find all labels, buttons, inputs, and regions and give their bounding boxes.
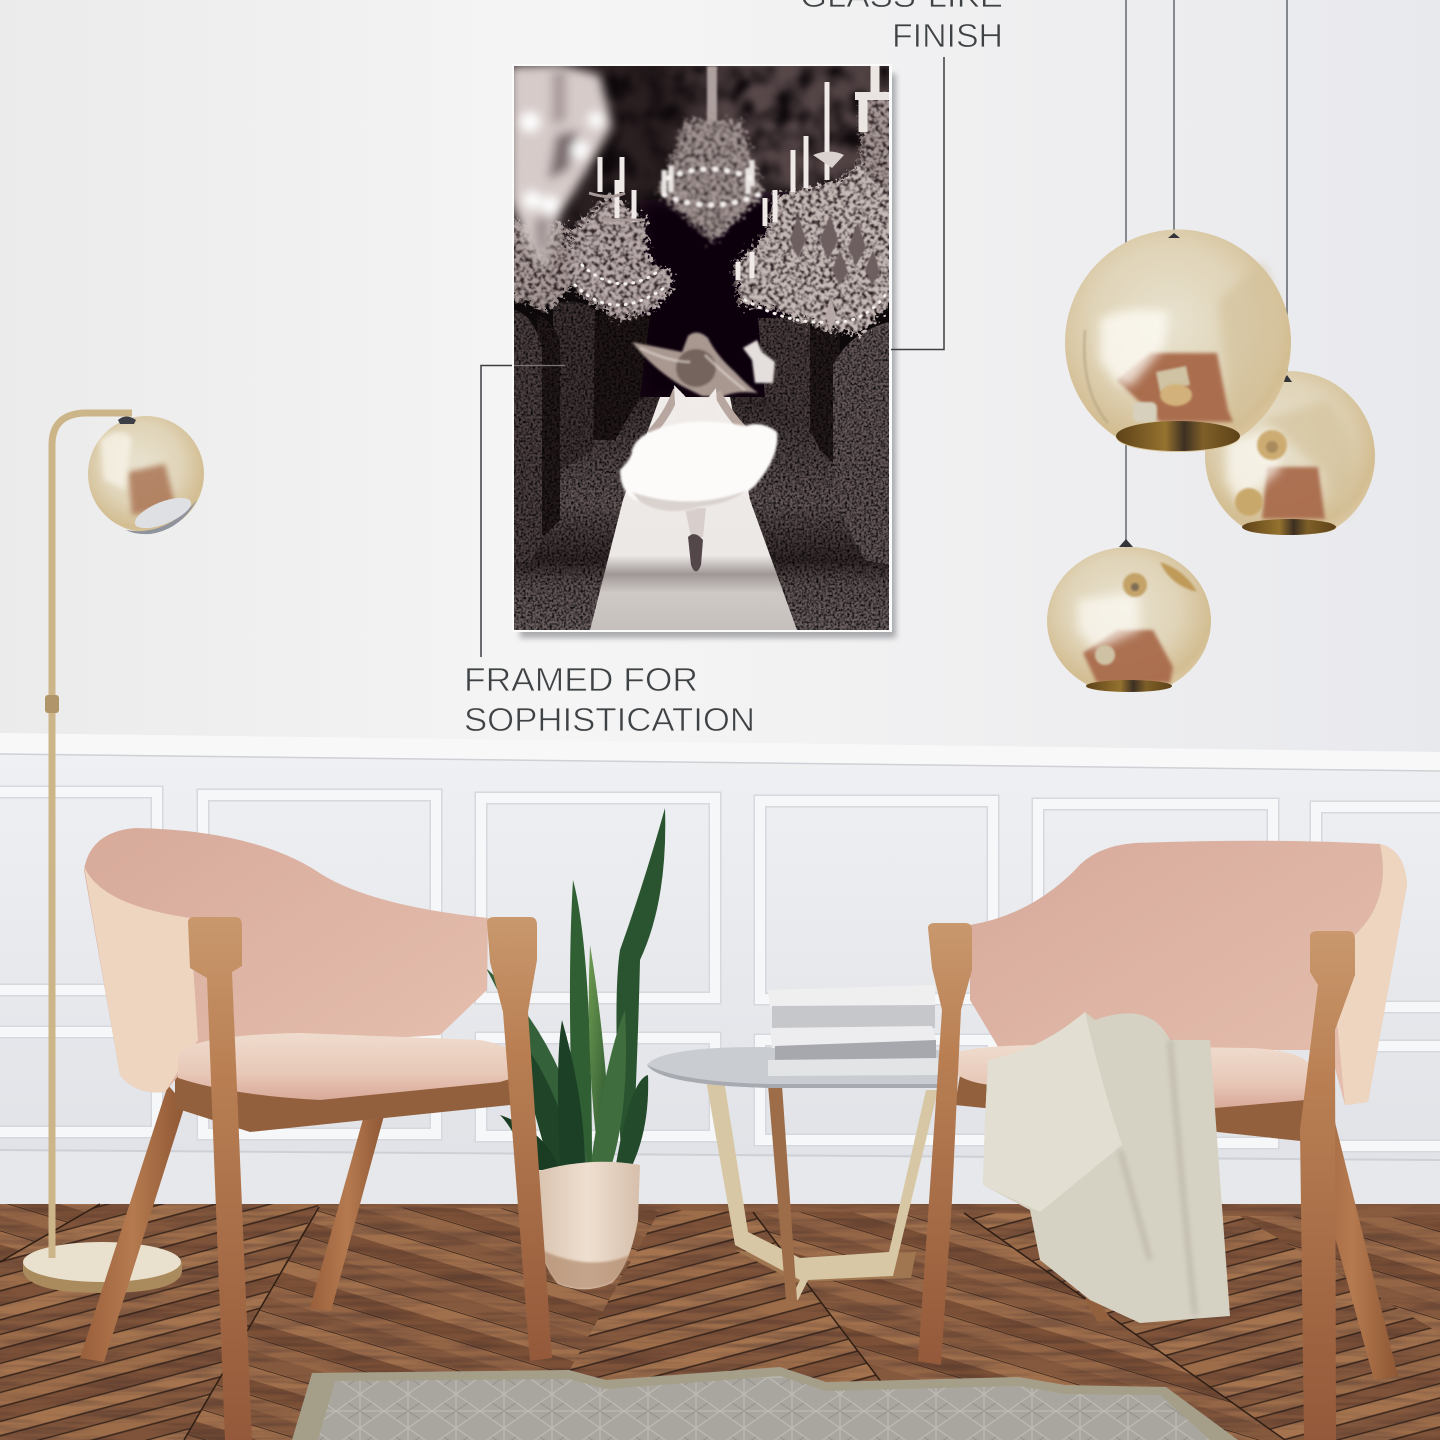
pendant lamp cords: [1126, 0, 1287, 548]
callout leader: glass-like finish: [891, 57, 944, 350]
left chandelier: [567, 157, 672, 320]
rug: [292, 1367, 1238, 1440]
right chandelier: [733, 66, 895, 335]
white rabbit figure: [743, 340, 775, 383]
snake plant: [486, 808, 665, 1170]
callout: framed for sophistication: FRAMED FOR: [464, 661, 698, 698]
callout: framed for sophistication: [464, 661, 755, 738]
floor lamp: [23, 413, 204, 1293]
wainscoting: [0, 733, 1440, 1218]
girl arms: [650, 390, 750, 436]
throw blanket: [983, 1012, 1230, 1323]
left chair: [80, 828, 552, 1440]
pendant globe: right: [1205, 371, 1375, 535]
blurred foreground chandelier: [510, 64, 612, 268]
pendant globe: large: [1065, 230, 1291, 452]
right chair: [918, 841, 1407, 1440]
callout: framed for sophistication: SOPHISTICATION: [464, 701, 755, 738]
far-left chandelier: [510, 222, 570, 312]
hedges: [514, 301, 889, 565]
girl legs: [685, 508, 706, 537]
pendant globe: bottom: [1047, 539, 1211, 692]
girl shoe: [688, 534, 703, 572]
framed artwork: [510, 64, 896, 638]
herringbone wood floor: [0, 1204, 1440, 1440]
girl bodice: [674, 385, 717, 405]
callout: glass-like finish: [800, 0, 1003, 54]
girl hair: [632, 332, 758, 397]
callout leader: framed: [481, 366, 512, 657]
tutu: [620, 422, 777, 511]
wall background: [0, 0, 1440, 760]
stack of books: [768, 985, 938, 1076]
center chandelier: [657, 66, 763, 243]
callout: glass-like finish: FINISH: [892, 17, 1003, 54]
photograph: girl among chandeliers: [510, 64, 895, 630]
plant pot: [535, 1162, 640, 1289]
side table: [647, 1047, 940, 1300]
